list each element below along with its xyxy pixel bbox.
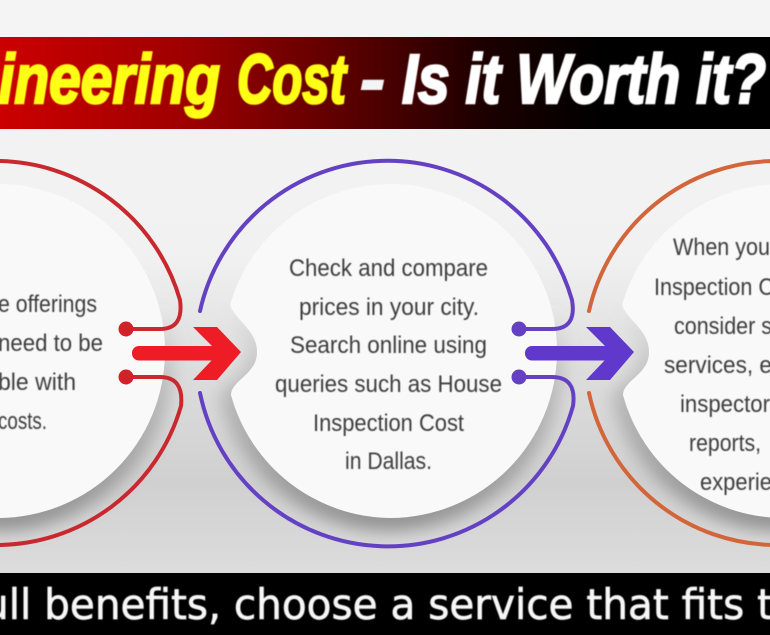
middle step text: prices in your city.: [299, 294, 479, 321]
bottom bar: [0, 573, 770, 635]
disc shadows: [0, 177, 770, 531]
middle step text: in Dallas.: [345, 448, 432, 475]
right step text: reports,: [689, 430, 761, 457]
title banner: [0, 37, 770, 129]
purple arrow: [525, 327, 634, 380]
left step: red ring and connector: [0, 161, 181, 545]
red connector dots: [118, 322, 134, 384]
middle step text: queries such as House: [275, 371, 502, 398]
right step: orange ring: [589, 161, 770, 545]
left step text: [0, 291, 103, 435]
purple connector dots: [512, 322, 526, 384]
left step text: e offerings: [0, 291, 97, 318]
middle step: purple ring and connector: [200, 161, 574, 546]
middle step text: [275, 255, 502, 475]
middle step text: Check and compare: [289, 255, 488, 282]
left step text: need to be: [0, 330, 103, 357]
title text: dash: -: [360, 40, 385, 118]
middle step text: Search online using: [290, 332, 487, 359]
right step text: [654, 234, 770, 496]
title text: yellow part: Cost: [237, 40, 348, 118]
red arrow: [132, 327, 241, 380]
left step text: ble with: [0, 369, 76, 396]
middle step text: Inspection Cost: [313, 410, 464, 437]
white discs: [0, 184, 770, 518]
